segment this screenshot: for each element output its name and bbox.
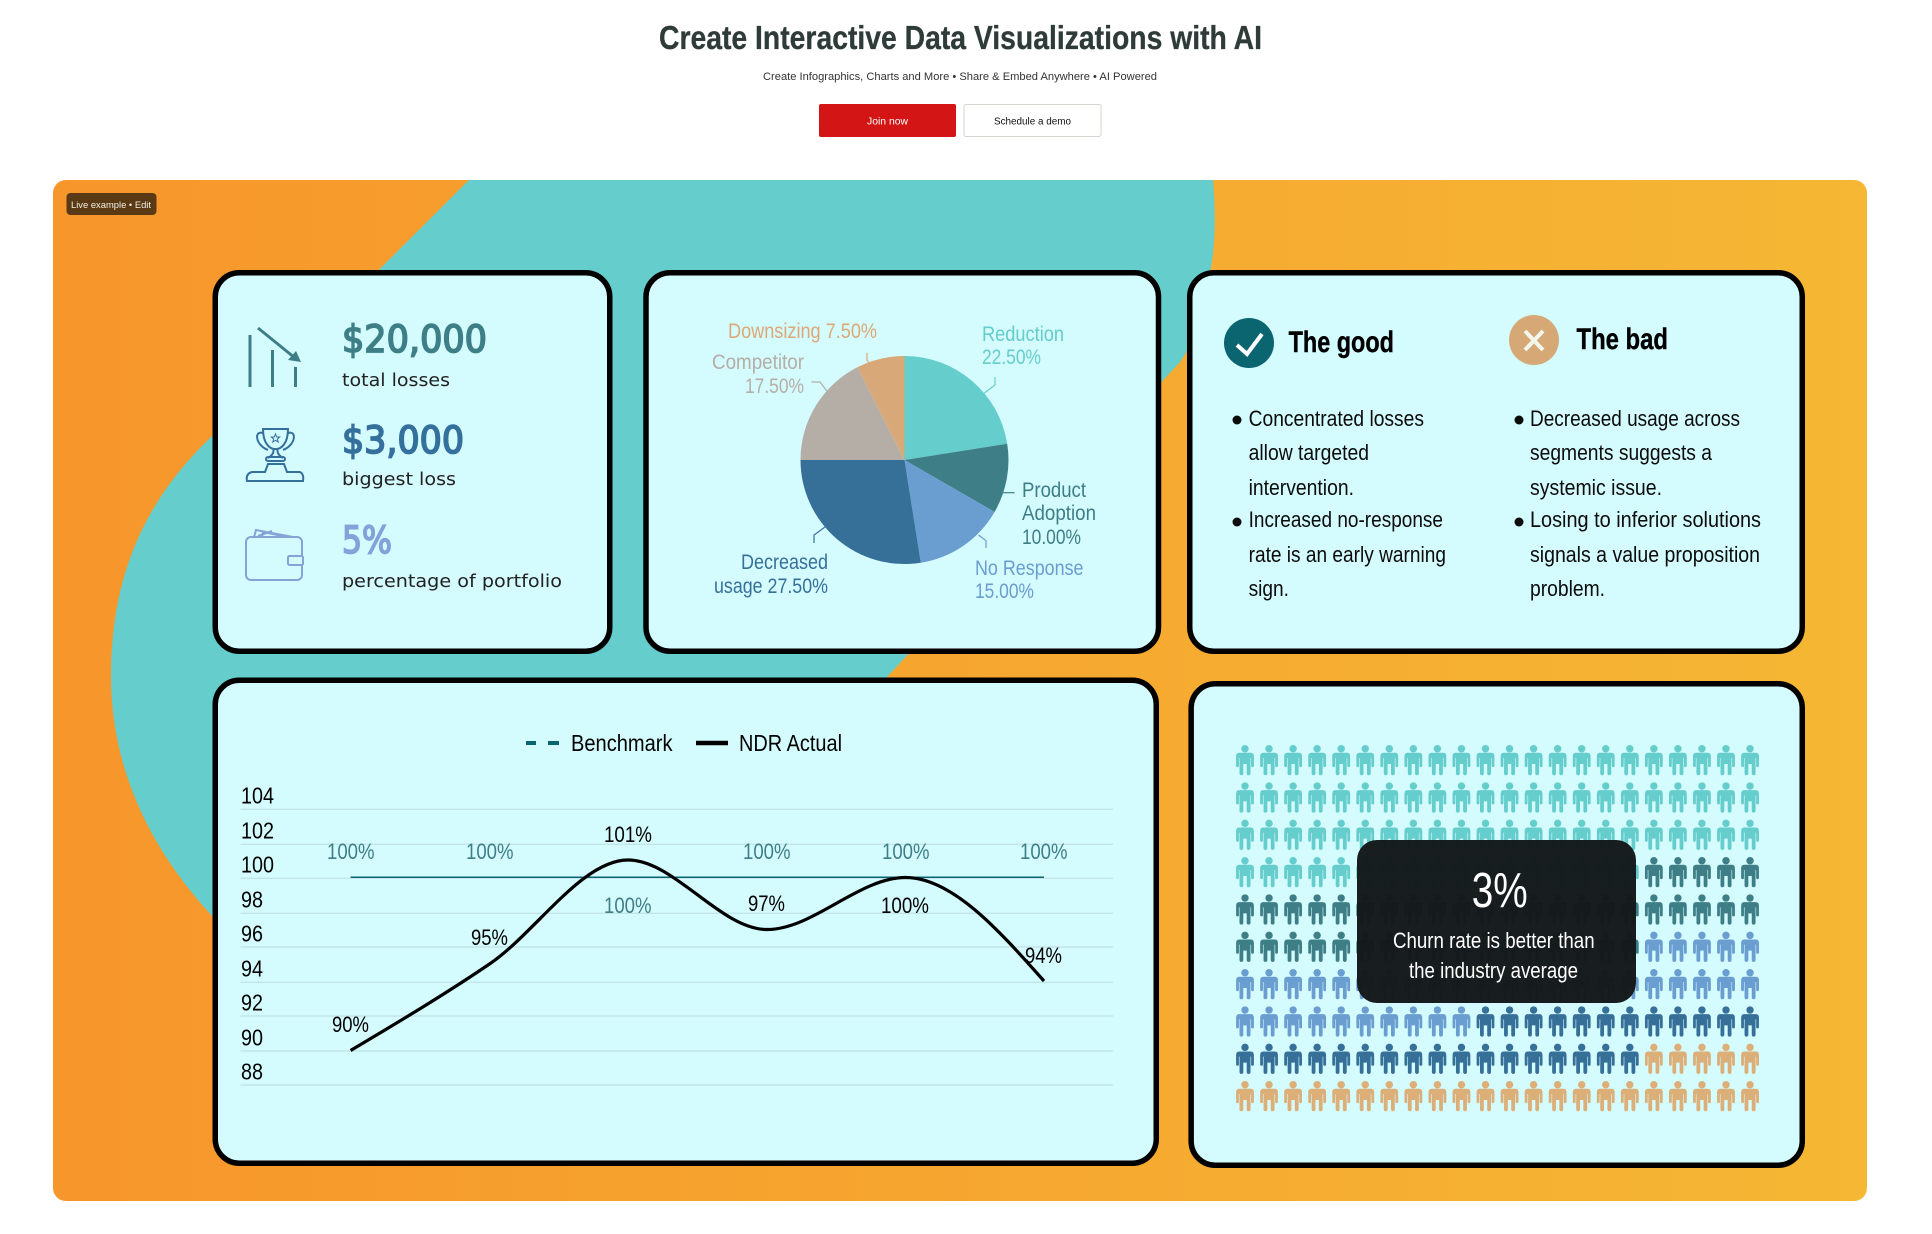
pie chart <box>800 356 1008 564</box>
list: good points: Increased no-response <box>1249 507 1443 532</box>
benchmark data labels: 100% <box>604 893 652 918</box>
legend: Benchmark <box>571 730 673 756</box>
metric: biggest loss <box>342 419 464 490</box>
callout: churn rate: 3% <box>1472 864 1528 918</box>
icon: wallet <box>246 530 303 580</box>
label: product adoption: Product <box>1022 478 1086 502</box>
label: decreased usage: Decreased <box>741 550 828 574</box>
list: bad points: problem. <box>1530 576 1605 601</box>
label: no response: No Response <box>975 556 1084 580</box>
callout: churn rate: Churn rate is better than <box>1393 928 1595 953</box>
benchmark data labels: 100% <box>466 839 514 864</box>
benchmark data labels: 100% <box>327 839 374 864</box>
panel: key metrics <box>215 273 610 651</box>
pictogram of people <box>1236 745 1759 1111</box>
metric: percentage of portfolio: percentage of portfolio <box>342 571 562 592</box>
panel: NDR line chart <box>215 680 1156 1163</box>
callout: churn rate: the industry average <box>1409 958 1578 983</box>
y axis labels <box>241 782 274 1084</box>
panel: churn reasons pie chart <box>646 273 1158 651</box>
y axis labels: 104 <box>241 782 274 808</box>
button: schedule a demo <box>964 104 1101 136</box>
icon: trophy <box>247 429 303 481</box>
tag: live example: Live example • Edit <box>71 200 151 211</box>
panel: the good and the bad <box>1190 273 1802 651</box>
heading: the good: The good <box>1289 326 1394 359</box>
label: product adoption <box>1003 478 1096 549</box>
list: bad points: segments suggests a <box>1530 440 1713 465</box>
label: reduction: Reduction <box>982 322 1064 346</box>
y axis labels: 100 <box>241 852 274 878</box>
y axis labels: 90 <box>241 1024 263 1050</box>
legend <box>526 730 842 756</box>
benchmark data labels <box>327 839 1068 918</box>
label: product adoption: Adoption <box>1022 501 1096 525</box>
label: reduction: 22.50% <box>982 345 1041 369</box>
actual data labels: 90% <box>332 1012 369 1037</box>
heading: the bad: The bad <box>1576 323 1668 356</box>
actual data labels: 94% <box>1025 943 1062 968</box>
title: Create Interactive Data Visualizations with AI <box>659 19 1262 56</box>
list: bad points: Losing to inferior solutions <box>1530 507 1761 532</box>
button: schedule a demo: Schedule a demo <box>994 116 1071 128</box>
label: no response <box>975 535 1084 603</box>
icon: declining bars <box>250 328 301 387</box>
metric: total losses: total losses <box>342 370 450 391</box>
y axis labels: 98 <box>241 886 263 912</box>
metric: percentage of portfolio: 5% <box>342 519 392 562</box>
label: reduction <box>982 322 1064 393</box>
icon: check <box>1224 318 1274 368</box>
list: bad points: systemic issue. <box>1530 475 1662 500</box>
label: competitor: Competitor <box>712 350 804 374</box>
y axis labels: 92 <box>241 990 263 1016</box>
list: good points: intervention. <box>1249 475 1354 500</box>
actual data labels: 95% <box>471 925 508 950</box>
benchmark data labels: 100% <box>1020 839 1068 864</box>
list: bad points <box>1514 406 1761 601</box>
actual data labels: 101% <box>604 822 652 847</box>
metric: total losses: $20,000 <box>342 318 487 361</box>
list: bad points: Decreased usage across <box>1530 406 1740 431</box>
legend: NDR Actual <box>739 730 842 756</box>
subtitle: Create Infographics, Charts and More • Share & Embed Anywhere • AI Powered <box>763 71 1157 83</box>
list: bad points: signals a value proposition <box>1530 542 1760 567</box>
metric: total losses <box>342 318 487 391</box>
actual data labels: 97% <box>748 891 785 916</box>
label: downsizing: Downsizing 7.50% <box>728 319 877 343</box>
actual data labels: 100% <box>881 893 929 918</box>
label: competitor: 17.50% <box>745 374 804 398</box>
y axis labels: 96 <box>241 920 263 946</box>
benchmark data labels: 100% <box>882 839 930 864</box>
label: decreased usage <box>714 527 828 598</box>
page header <box>659 19 1262 137</box>
label: product adoption: 10.00% <box>1022 525 1081 549</box>
panel: churn pictogram <box>1191 684 1802 1165</box>
teal blob <box>111 180 1215 916</box>
list: good points <box>1232 406 1446 601</box>
benchmark data labels: 100% <box>743 839 790 864</box>
metric: biggest loss: $3,000 <box>342 419 464 462</box>
y axis labels: 102 <box>241 818 274 844</box>
metric: biggest loss: biggest loss <box>342 469 456 490</box>
list: good points: sign. <box>1249 576 1289 601</box>
panel: infographic background <box>53 180 1867 1201</box>
list: good points: Concentrated losses <box>1249 406 1424 431</box>
label: decreased usage: usage 27.50% <box>714 574 828 598</box>
callout: churn rate <box>1357 840 1636 1003</box>
benchmark line <box>351 876 1044 878</box>
actual data labels <box>332 822 1062 1037</box>
y axis labels: 94 <box>241 956 263 982</box>
icon: cross <box>1509 315 1559 365</box>
tag: live example <box>66 193 156 215</box>
y axis labels: 88 <box>241 1058 263 1084</box>
NDR actual curve <box>351 860 1044 1050</box>
label: competitor <box>712 350 828 398</box>
list: good points: allow targeted <box>1249 440 1369 465</box>
label: no response: 15.00% <box>975 579 1034 603</box>
button: join now: Join now <box>867 116 909 128</box>
metric: percentage of portfolio <box>342 519 562 592</box>
button: join now <box>819 104 956 137</box>
list: good points: rate is an early warning <box>1249 542 1446 567</box>
